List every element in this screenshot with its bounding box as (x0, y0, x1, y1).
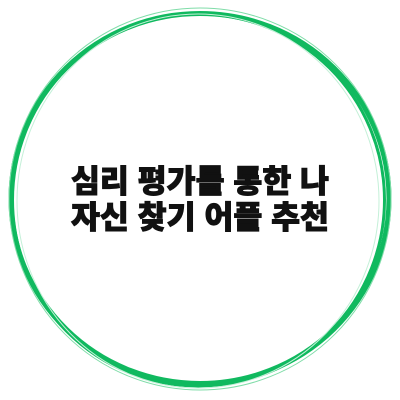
title: 심리 평가를 통한 나 (71, 163, 329, 199)
title (70, 163, 329, 235)
title: 자신 찾기 어플 추천 (71, 199, 329, 235)
